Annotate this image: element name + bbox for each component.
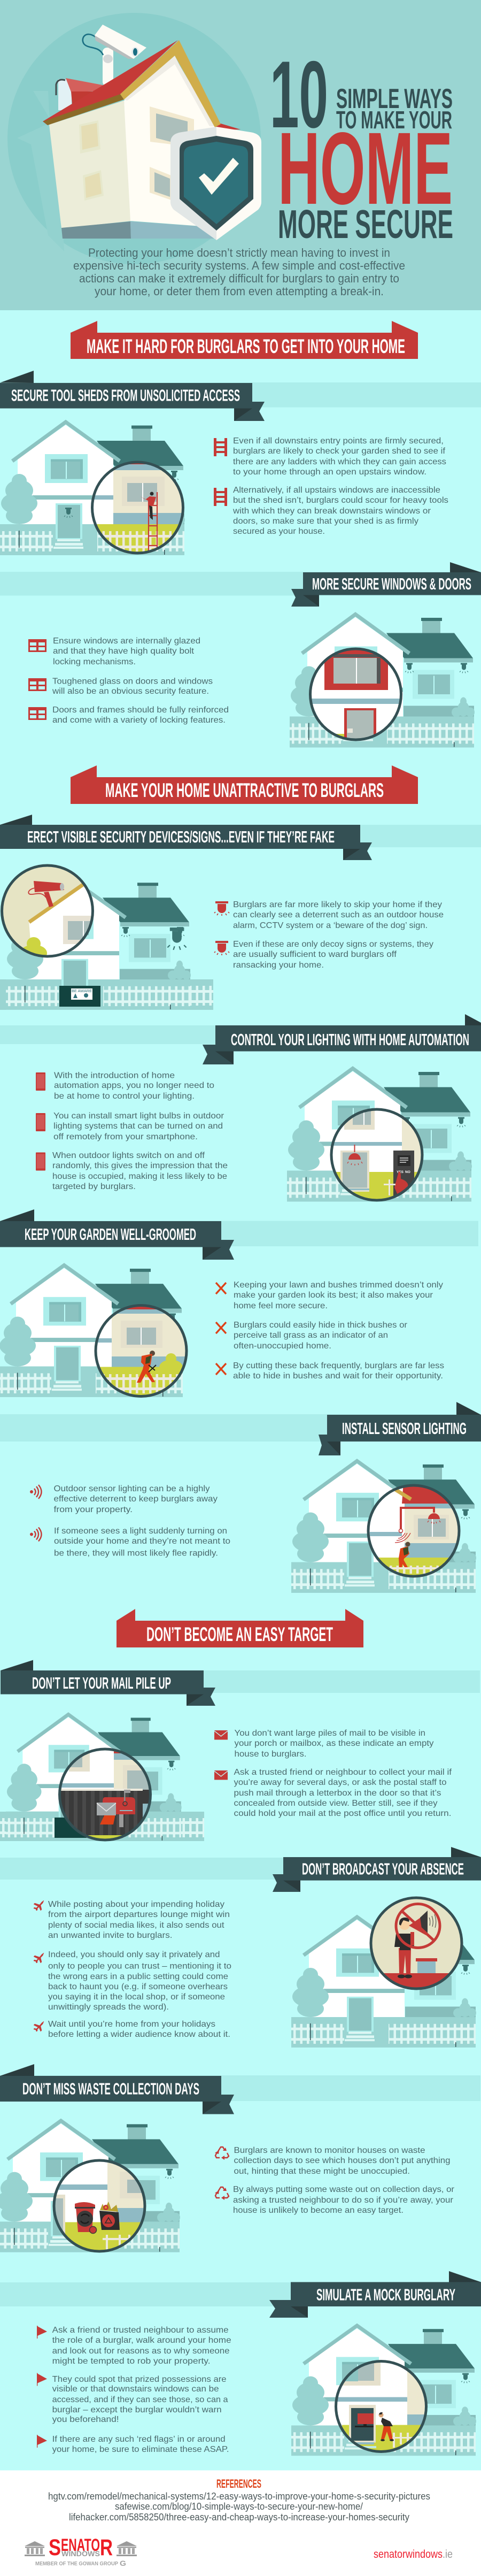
text: point 1 [52, 2326, 231, 2366]
text: point 2: will also be an obvious security feature. [52, 687, 209, 696]
ribbon heading [0, 2271, 481, 2318]
magnifier: gardener [95, 1304, 189, 1399]
text: point 1: burglars are likely to check your garden shed to see if [233, 447, 446, 456]
ribbon heading [0, 2064, 480, 2114]
text: point 2: house is unlikely to become an easy target. [233, 2206, 404, 2215]
text: point 3 [52, 2435, 229, 2454]
icon: cross [216, 1322, 226, 1333]
house illustration [0, 422, 185, 555]
text: point 1: Outdoor sensor lighting can be a highly [53, 1484, 210, 1493]
text: point 1 [234, 1281, 443, 1310]
text: point 2: visible or that downstairs windows can be [52, 2385, 219, 2394]
icon: sensor waves [30, 1528, 42, 1542]
text: point 1: from your property. [53, 1505, 133, 1514]
text: point 2: the wrong ears in a public setting could come [48, 1972, 228, 1981]
icon: envelope [214, 1730, 228, 1739]
text: point 2 [52, 677, 213, 696]
text: point 1 [234, 1729, 434, 1759]
panel: mail pile up [0, 1660, 480, 1843]
icon: window [28, 678, 46, 691]
icon: ladder [214, 438, 227, 456]
text: point 3: able to hide in bushes and wait for their opportunity. [233, 1371, 443, 1381]
text: point 2: Indeed, you should only say it privately and [48, 1950, 220, 1959]
text: point 1 [233, 900, 444, 930]
text: point 1: plenty of social media likes, it also sends out [48, 1921, 224, 1930]
panel: secure tool sheds [0, 371, 481, 555]
ribbon heading: SECURE TOOL SHEDS FROM UNSOLICITED ACCESS [11, 386, 240, 404]
text: point 3: targeted by burglars. [52, 1182, 136, 1191]
text: point 1: You don’t want large piles of mail to be visible in [234, 1729, 425, 1738]
text: point 2: asking a trusted neighbour to do so if you’re away, your [233, 2196, 454, 2205]
icon: ladder [214, 488, 227, 506]
icon: red flag [37, 2326, 47, 2339]
sign: be aware: BE AWARE [72, 988, 92, 993]
text: point 1: With the introduction of home [54, 1071, 175, 1080]
icon: plane [34, 1900, 44, 1911]
text: point 2: you beforehand! [52, 2415, 119, 2424]
logo: senator windows: R [100, 2535, 113, 2560]
ribbon heading: DON’T LET YOUR MAIL PILE UP [32, 1674, 171, 1692]
panel: mock burglary [0, 2271, 481, 2456]
references list [48, 2490, 430, 2523]
text: point 1: make your garden look its best; it also makes your [234, 1291, 433, 1300]
magnifier: sensor light [367, 1482, 461, 1579]
text: point 3: your home, be sure to eliminate these ASAP. [52, 2445, 229, 2454]
ribbon heading: DON’T MISS WASTE COLLECTION DAYS [22, 2080, 199, 2098]
text: point 2 [53, 1111, 224, 1141]
text: point 1: collection days to see which houses don’t put anything [234, 2156, 450, 2165]
text: point 2: be there, they will most likely flee rapidly. [54, 1549, 218, 1558]
text: point 2 [52, 2375, 228, 2424]
icon: phone [36, 1152, 45, 1170]
text: point 2: doors, so make sure that your shed is as firmly [233, 517, 418, 526]
magnifier: bins [52, 2159, 146, 2254]
text: point 1: automation apps, you no longer need to [54, 1081, 214, 1090]
panel: footer [0, 2470, 481, 2576]
text: point 3 [52, 1151, 228, 1191]
ribbon heading: KEEP YOUR GARDEN WELL-GROOMED [25, 1225, 196, 1244]
text: point 1: to your home through an open upstairs window. [233, 467, 426, 477]
text: point 2: perceive tall grass as an indicator of an [234, 1331, 388, 1340]
text: point 3: Doors and frames should be fully reinforced [52, 706, 229, 715]
section banner: easy target [117, 1609, 363, 1647]
text: point 2: often-unoccupied home. [234, 1341, 331, 1351]
ribbon heading [0, 1014, 481, 1064]
ribbon heading [0, 1402, 481, 1455]
ribbon heading [0, 815, 481, 860]
text: point 2: only to people you can trust – mentioning it to [48, 1962, 231, 1971]
text: point 3 [233, 1361, 444, 1381]
text: point 2: Toughened glass on doors and windows [52, 677, 213, 686]
text: point 1: Even if all downstairs entry points are firmly secured, [233, 436, 444, 446]
text: point 1: out, hinting that these might be unoccupied. [234, 2167, 410, 2176]
text: point 1: be at home to control your lighting. [54, 1092, 195, 1101]
text: point 1: and that they have high quality bolt [53, 647, 195, 656]
panel: broadcast absence [0, 1847, 481, 2048]
text: point 1: from the airport departures lounge might win [48, 1910, 230, 1919]
magnifier: smartphone control: YES [397, 1170, 404, 1174]
intro paragraph: expensive hi-tech security systems. A few simple and cost-effective [73, 259, 405, 272]
text: point 2: but the shed isn’t, burglars could scour for heavy tools [233, 496, 448, 505]
text: point 1 [54, 1071, 214, 1101]
intro paragraph: your home, or deter them from even attempting a break-in. [95, 285, 384, 298]
references list: lifehacker.com/5858250/three-easy-and-cheap-ways-to-increase-your-homes-security [69, 2511, 410, 2523]
text: point 2: with which they can break downstairs windows or [232, 507, 431, 516]
house illustration [0, 1714, 204, 1841]
text: point 1: and look out for reasons as to why someone [52, 2347, 230, 2356]
ribbon heading [0, 371, 481, 421]
text: point 3 [48, 2020, 230, 2039]
text: point 1: the role of a burglar, walk around your home [52, 2336, 231, 2345]
icon: phone [36, 1072, 45, 1091]
magnifier: burglar looking in [335, 2359, 429, 2454]
text: point 3: When outdoor lights switch on and off [52, 1151, 205, 1160]
intro paragraph: Protecting your home doesn’t strictly mean having to invest in [88, 246, 390, 259]
text: point 1: can clearly see a deterrent such as an outdoor house [233, 910, 444, 919]
icon: red flag [37, 2373, 47, 2386]
heading: references: REFERENCES [216, 2477, 261, 2490]
house illustration [0, 879, 213, 1010]
text: point 1: Keeping your lawn and bushes trimmed doesn’t only [234, 1281, 443, 1290]
text: point 2: Ask a trusted friend or neighbour to collect your mail if [234, 1768, 452, 1777]
panel: waste collection [0, 2064, 480, 2254]
text: point 3: and come with a variety of locking features. [52, 716, 226, 725]
icon: plane [34, 2021, 44, 2031]
text: point 1: home feel more secure. [234, 1301, 328, 1310]
text: point 1 [234, 2146, 450, 2176]
house illustration [291, 1917, 476, 2048]
magnifier: mailbox [58, 1748, 152, 1843]
panel: windows and doors [0, 562, 481, 748]
text: point 2: outside your home and they’re not meant to [54, 1537, 230, 1546]
title [270, 41, 453, 247]
text: point 1: might be tempted to rob your property. [52, 2357, 211, 2366]
website link: senatorwindows.ie [374, 2548, 453, 2560]
icon: security camera [83, 25, 146, 86]
icon: red flag [37, 2435, 47, 2448]
magnifier: camera [0, 864, 96, 962]
text: point 2 [234, 1321, 408, 1351]
text: point 1: Ask a friend or trusted neighbour to assume [52, 2326, 229, 2335]
text: point 2 [233, 2185, 455, 2215]
text: point 1: house to burglars. [234, 1750, 307, 1759]
text: point 2: you saying it in the local shop, or if someone [48, 1992, 225, 2002]
icon: window [28, 707, 46, 720]
icon: recycle [215, 2147, 229, 2160]
text: point 2: burglar – except the burglar wouldn’t warn [52, 2405, 222, 2414]
references list: safewise.com/blog/10-simple-ways-to-secure-your-new-home/ [115, 2501, 363, 2512]
text: point 1: Ensure windows are internally glazed [53, 637, 200, 646]
house illustration [290, 614, 475, 748]
text: point 2: concealed from outside view. Better still, see if they [234, 1799, 437, 1808]
text: point 2: Alternatively, if all upstairs windows are inaccessible [233, 486, 440, 495]
ribbon heading [0, 1209, 478, 1260]
text: point 2: unwittingly spreads the word). [48, 2003, 169, 2012]
references list: hgtv.com/remodel/mechanical-systems/12-easy-ways-to-improve-your-home-s-security-pictures [48, 2490, 430, 2502]
text: point 3: Wait until you’re home from your holidays [48, 2020, 215, 2029]
text: point 2: back to haunt you (e.g. if someone overhears [48, 1982, 228, 1991]
text: point 2 [233, 940, 433, 970]
house illustration [291, 2326, 476, 2456]
panel: home automation lighting [0, 1014, 481, 1203]
text: point 2: If someone sees a light suddenly turning on [54, 1527, 227, 1536]
text: point 2: secured as your house. [233, 527, 325, 536]
text: point 1: While posting about your impending holiday [48, 1900, 224, 1909]
text: point 3: If there are any such ‘red flags’ in or around [52, 2435, 226, 2444]
logo: senator windows: S [49, 2535, 61, 2560]
icon: sensor waves [30, 1485, 42, 1499]
panel: well-groomed garden [0, 1209, 478, 1399]
text: point 3: randomly, this gives the impression that the [52, 1161, 228, 1170]
text: point 1 [53, 1484, 218, 1514]
text: point 2: By always putting some waste out on collection days, or [233, 2185, 455, 2194]
icon: envelope [214, 1770, 228, 1780]
icon: recycle [215, 2187, 229, 2200]
text: point 2: lighting systems that can be turned on and [53, 1122, 223, 1131]
title: 10 [270, 41, 328, 148]
text: point 1: effective deterrent to keep burglars away [53, 1494, 218, 1504]
house illustration [0, 2121, 180, 2252]
text: point 3 [52, 706, 229, 725]
sign: be aware [59, 986, 100, 1007]
text: point 1: an unwanted invite to burglars. [48, 1931, 172, 1940]
icon: phone [36, 1113, 45, 1131]
text: point 1: locking mechanisms. [53, 657, 136, 666]
logo: senator windows [25, 2535, 137, 2567]
section banner: make it hard [71, 321, 418, 359]
text: point 1: Burglars are far more likely to skip your home if they [233, 900, 442, 909]
text: point 2: could hold your mail at the post office until you return. [234, 1809, 451, 1818]
logo: senator windows: G [120, 2559, 126, 2567]
magnifier: megaphone [369, 1896, 464, 1991]
text: point 2 [232, 486, 448, 536]
icon: cross [216, 1363, 226, 1375]
house illustration [43, 40, 241, 239]
text: point 2: They could spot that prized possessions are [52, 2375, 227, 2384]
text: point 1 [233, 436, 446, 477]
ribbon heading [0, 562, 481, 607]
text: point 2: you’re away for several days, or ask the postal staff to [234, 1778, 447, 1787]
magnifier: ladder [91, 460, 185, 555]
text: point 1: alarm, CCTV system or a ‘beware of the dog’ sign. [233, 921, 428, 930]
logo: senator windows: MEMBER OF THE GOWAN GROUP [35, 2560, 118, 2567]
text: point 2: push mail through a letterbox in the door so that it’s [234, 1789, 441, 1798]
text: point 2: Burglars could easily hide in thick bushes or [234, 1321, 408, 1330]
logo: senator windows: ENATO [61, 2535, 100, 2555]
icon: shield with check [170, 127, 261, 240]
text: point 1: your porch or mailbox, as these indicate an empty [234, 1739, 434, 1748]
text: point 1 [48, 1900, 230, 1940]
text: point 3: By cutting these back frequently, burglars are far less [233, 1361, 444, 1370]
text: point 2: off remotely from your smartphone. [53, 1132, 198, 1141]
text: point 2: accessed, and if they can see those, so can a [52, 2395, 228, 2404]
text: point 2: ransacking your home. [233, 961, 324, 970]
section banner: unattractive [71, 765, 418, 804]
panel: sensor lighting [0, 1402, 481, 1593]
magnifier: windows and door [309, 645, 403, 742]
text: point 2: are usually sufficient to ward burglars off [233, 950, 397, 959]
text: point 1: Burglars are known to monitor houses on waste [234, 2146, 425, 2155]
house illustration [0, 1265, 183, 1397]
text: point 1 [53, 637, 200, 666]
icon: alarm [214, 941, 229, 955]
magnifier: smartphone control [330, 1107, 424, 1203]
intro paragraph [73, 246, 405, 298]
text: point 2 [48, 1950, 231, 2012]
text: point 2: You can install smart light bulbs in outdoor [53, 1111, 224, 1121]
icon: window [28, 639, 46, 652]
intro paragraph: actions can make it extremely difficult for burglars to gain entry to [79, 272, 399, 285]
panel: visible security devices [0, 815, 481, 1010]
ribbon heading [1, 1660, 480, 1706]
house illustration [291, 1461, 476, 1593]
text: point 3: house is occupied, making it less likely to be [52, 1172, 227, 1181]
house illustration [287, 1069, 472, 1201]
text: point 1: there are any ladders with which they can gain access [233, 457, 446, 466]
icon: cross [216, 1283, 226, 1294]
icon: alarm [214, 901, 229, 916]
text: point 2: Even if these are only decoy signs or systems, they [233, 940, 433, 949]
ribbon heading [0, 1847, 481, 1892]
icon: plane [34, 1953, 44, 1963]
text: point 2 [54, 1527, 230, 1558]
section banner: easy target: DON’T BECOME AN EASY TARGET [146, 1623, 333, 1645]
text: point 3: before letting a wider audience know about it. [48, 2030, 230, 2039]
magnifier: smartphone control: NO [405, 1170, 410, 1174]
text: point 2 [234, 1768, 452, 1818]
logo: senator windows: WINDOWS [61, 2550, 100, 2558]
panel: hero header [0, 0, 481, 310]
